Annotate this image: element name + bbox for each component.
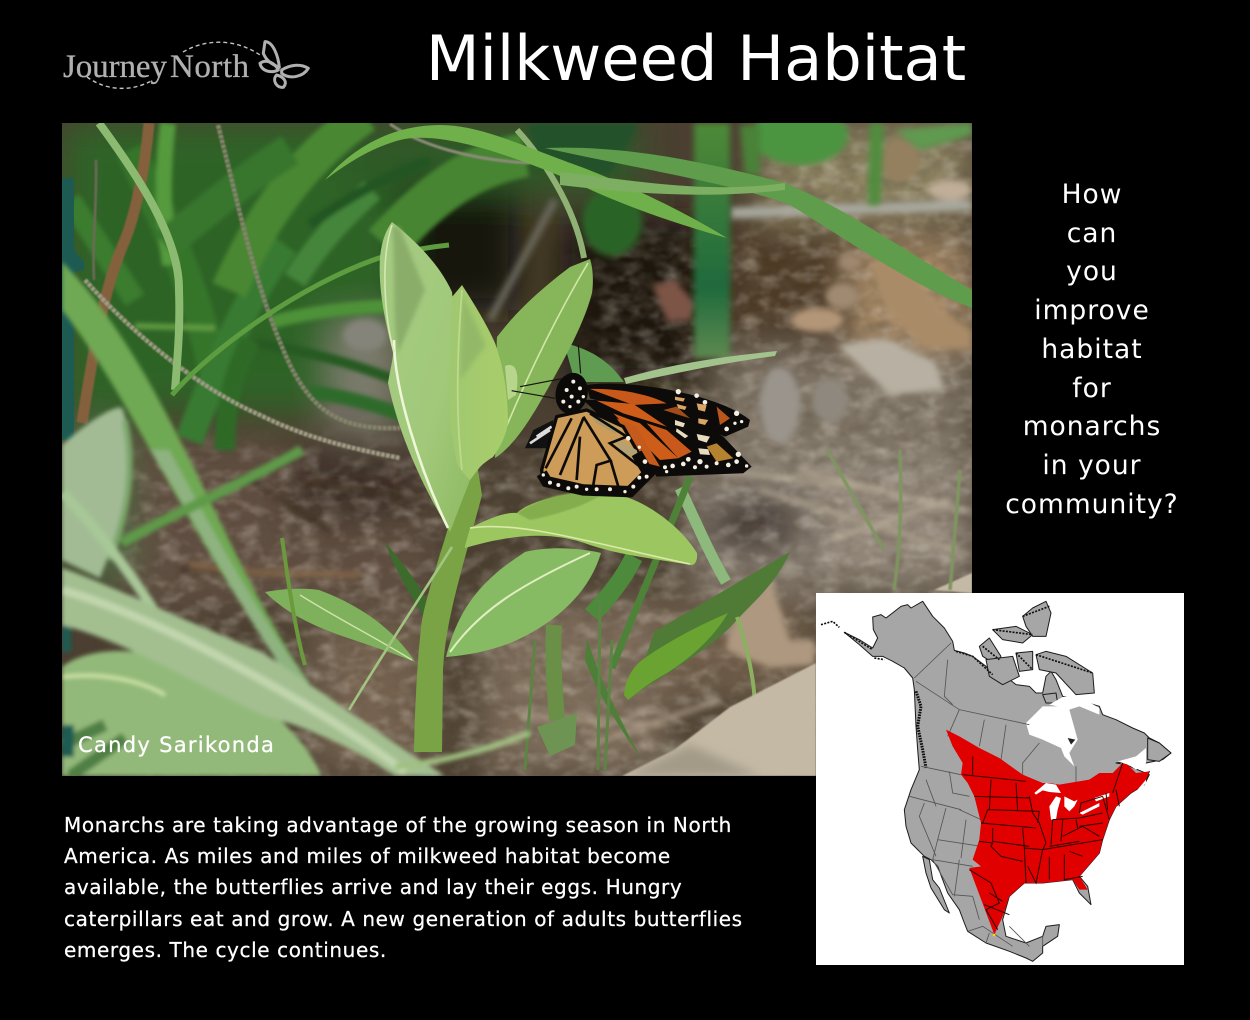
foreground blurred grass and leaves — [62, 262, 530, 776]
small lower leaf — [446, 548, 601, 657]
logo: Journey North — [63, 40, 310, 90]
stones, dead leaves and twigs — [180, 138, 972, 745]
body text: available, the butterflies arrive and lay their eggs. Hungry — [64, 875, 682, 899]
surrounding grass blades — [680, 488, 726, 582]
panel: milkweed and monarch photo — [62, 123, 972, 776]
thin blade low — [395, 733, 530, 767]
western borders — [909, 643, 1076, 946]
thorax and head — [552, 370, 592, 417]
fence post — [62, 178, 84, 440]
coast speckle — [916, 691, 926, 768]
lower broad leaf — [62, 651, 322, 776]
monarch butterfly — [512, 345, 752, 495]
photo credit: Candy Sarikonda — [78, 733, 275, 757]
broad lower leaf — [465, 492, 697, 565]
logo: Journey North: Journey — [63, 49, 168, 85]
question text: improve — [1034, 295, 1150, 326]
background green leaves and stalk — [527, 105, 972, 358]
thin right grass — [827, 450, 960, 590]
bottom green — [62, 705, 135, 776]
question text — [1005, 179, 1179, 520]
left pale leaf — [62, 408, 130, 578]
near forewing — [583, 400, 752, 477]
right upper leaf — [495, 259, 593, 458]
stake and twine — [82, 123, 530, 458]
question text: in your — [1042, 450, 1142, 481]
milkweed plant — [265, 222, 790, 770]
center leaf — [450, 285, 508, 480]
question text: for — [1072, 373, 1112, 404]
large diagonal blade — [62, 262, 309, 690]
question text: monarchs — [1023, 411, 1161, 442]
small bud leaf — [505, 365, 517, 400]
body text: emerges. The cycle continues. — [64, 938, 387, 962]
long grass leaves crossing top — [325, 125, 972, 308]
lower dark leaf — [634, 552, 790, 695]
concrete edge — [622, 573, 972, 776]
question text: can — [1067, 218, 1117, 249]
body text: caterpillars eat and grow. A new generation of adults butterflies — [64, 907, 743, 931]
great lakes — [1034, 780, 1146, 820]
state borders — [963, 756, 1123, 930]
tall left leaf — [380, 222, 470, 532]
huge pale blade — [62, 568, 445, 776]
antennae — [512, 345, 581, 398]
overwintering marker — [993, 934, 995, 936]
hindwing — [542, 410, 650, 495]
question text: habitat — [1041, 334, 1143, 365]
far forewing — [587, 384, 750, 437]
icon: logo butterfly — [260, 42, 308, 87]
body text: America. As miles and miles of milkweed habitat become — [64, 844, 671, 868]
Gulf of St Lawrence — [1118, 748, 1146, 770]
light blade — [62, 493, 155, 612]
background foliage and mulch — [62, 123, 972, 776]
white spots — [542, 380, 748, 493]
stem — [414, 470, 482, 752]
title: Milkweed Habitat — [426, 22, 966, 95]
map: monarch range in North America — [816, 593, 1184, 965]
thin curved blades upper — [99, 123, 584, 395]
mulch texture — [62, 123, 972, 776]
Hudson Bay — [1026, 696, 1099, 766]
black rear body — [525, 420, 553, 448]
logo: Journey North: North — [170, 49, 250, 85]
thin blade — [122, 450, 302, 543]
dark green blades upper left — [70, 115, 525, 450]
dark blade beside stem — [385, 542, 430, 620]
body text — [64, 813, 743, 962]
question text: community? — [1005, 489, 1179, 520]
question text: you — [1066, 256, 1118, 287]
red monarch breeding range — [946, 730, 1149, 935]
grass behind plant — [564, 343, 624, 382]
question text: How — [1062, 179, 1122, 210]
left lower leaf — [265, 589, 415, 662]
body text: Monarchs are taking advantage of the growing season in North — [64, 813, 732, 837]
land mass — [844, 601, 1171, 961]
